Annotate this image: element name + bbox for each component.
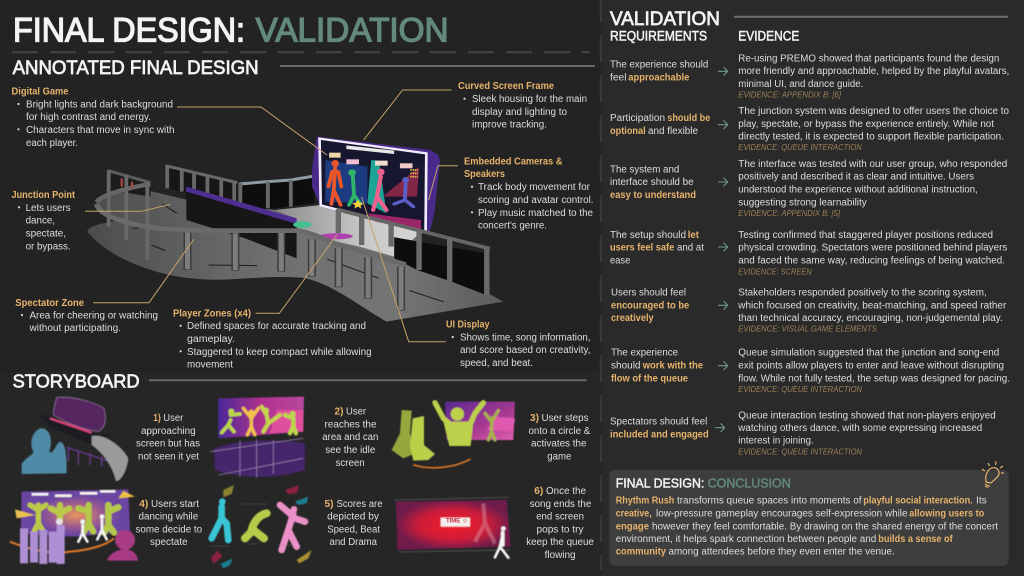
storyboard illustrations, first columns xyxy=(10,397,312,568)
story caption 4: 4) xyxy=(139,499,148,510)
row 4: feel safe: users feel safe xyxy=(610,243,675,254)
callout: player zones: Player Zones (x4) xyxy=(173,308,251,320)
row 7: included and engaged: Spectators should feel xyxy=(610,417,707,428)
conclusion heading: FINAL DESIGN: xyxy=(616,476,704,490)
story caption 5: depicted by xyxy=(327,512,379,522)
callout: embedded cameras and speakers: concert's genre. xyxy=(478,220,547,232)
callout: UI display: Shows time, song information, xyxy=(460,332,590,344)
callout: digital game xyxy=(12,86,174,149)
story caption 6 xyxy=(526,486,594,561)
row 6: flow of the queue: flow of the queue xyxy=(611,373,688,384)
title: VALIDATION xyxy=(256,12,449,50)
row 4: feel safe xyxy=(610,230,1007,276)
sketch 1: user approaching xyxy=(22,397,128,481)
story caption 4: Users start xyxy=(151,499,199,510)
story caption 6: end screen xyxy=(536,512,584,522)
callout: junction point: dance, xyxy=(26,216,55,226)
conclusion heading: CONCLUSION xyxy=(708,476,791,490)
callout: player zones: Staggered to keep compact while allowing xyxy=(187,347,372,358)
row 1: approachable: The experience should xyxy=(610,60,708,71)
story caption 3: onto a circle & xyxy=(528,426,591,437)
callout: curved screen frame: display and lighting to xyxy=(472,107,567,118)
row 7: included and engaged: Queue interaction testing showed that non-players enjoyed xyxy=(738,410,996,421)
panel: conclusion xyxy=(609,462,1009,566)
story caption 3: game xyxy=(547,452,572,462)
conclusion text: low-pressure gameplay encourages self-expression while xyxy=(656,508,908,519)
row 2: optional xyxy=(610,106,1009,152)
conclusion text: Rhythm Rush xyxy=(616,496,674,507)
screen housing xyxy=(312,137,440,233)
callout: embedded cameras and speakers: Play music matched to the xyxy=(478,208,593,219)
row 4: feel safe: ease xyxy=(610,255,631,266)
callout: junction point: or bypass. xyxy=(26,242,71,252)
row 2: optional: optional xyxy=(610,126,646,137)
row 6: flow of the queue xyxy=(611,348,1010,394)
story caption 2: see the idle xyxy=(325,445,376,456)
story caption 6: pops to try xyxy=(536,524,584,536)
conclusion text: transforms queue spaces into moments of xyxy=(677,496,862,507)
row 4: feel safe: let xyxy=(688,230,700,241)
row 6: flow of the queue: exit points allow players to enter and leave without disrupting xyxy=(738,360,1004,371)
row 6: flow of the queue: should xyxy=(611,360,640,371)
heading: validation: VALIDATION xyxy=(610,8,720,30)
story caption 3: 3) xyxy=(530,413,539,424)
callout: digital game: Bright lights and dark background xyxy=(26,100,173,110)
row 1: approachable xyxy=(610,53,1009,100)
row 5: encouraged: Stakeholders responded positively to the scoring system, xyxy=(738,287,987,298)
conclusion text: community xyxy=(616,547,666,558)
row 2: optional: play, spectate, or bypass the experience entirely. While not xyxy=(738,119,994,130)
callout: spectator zone: without participating. xyxy=(28,323,121,334)
callout: embedded cameras and speakers: Track body movement for xyxy=(478,182,591,193)
row 7: included and engaged: included and engaged xyxy=(610,429,709,440)
conclusion text: environment, it helps spark connection between people and xyxy=(616,534,876,545)
row 1: approachable: more friendly and approachable, helped by the playful avatars, xyxy=(738,66,1009,77)
story caption 2: 2) xyxy=(334,406,344,418)
heading: annotated final design: ANNOTATED FINAL DESIGN xyxy=(13,57,259,79)
row 1: approachable: minimal UI, and dance guide. xyxy=(738,79,863,90)
callout: embedded cameras and speakers: scoring and avatar control. xyxy=(478,195,594,206)
row 3: easy to understand: understood the experience without additional instruction, xyxy=(738,185,978,196)
callout: player zones: gameplay. xyxy=(187,334,235,345)
row 4: feel safe: EVIDENCE: SCREEN xyxy=(738,267,812,276)
time label on end screen: TIME ☺ xyxy=(446,518,468,524)
row 4: feel safe: physical crowding. Spectators were positioned behind players xyxy=(738,243,1007,254)
row 4: feel safe: The setup should xyxy=(610,230,686,241)
callout: junction point: Junction Point xyxy=(12,190,76,201)
row 6: flow of the queue: work with the xyxy=(642,360,703,371)
sketch 5: scores xyxy=(210,485,312,568)
row 2: optional: directly tested, it is expected to support flexible participation. xyxy=(738,132,1004,143)
row 7: included and engaged: watching others dance, with some expressing increased xyxy=(737,423,982,434)
sketch 2: idle screen xyxy=(210,397,305,477)
story caption 3: activates the xyxy=(531,439,587,450)
storyboard illustrations, last columns xyxy=(392,402,515,558)
row 6: flow of the queue: EVIDENCE: QUEUE INTERACTION xyxy=(738,385,862,394)
row 4: feel safe: and faced the same way, reducing feelings of being watched. xyxy=(738,255,1005,266)
purple-topped wall xyxy=(186,187,312,258)
row 4: feel safe: and at xyxy=(677,243,704,254)
row 5: encouraged: than technical accuracy, encouraging, non-judgemental play. xyxy=(738,313,1003,324)
row 3: easy to understand: The system and xyxy=(610,164,679,175)
row 7: included and engaged: EVIDENCE: QUEUE INTERACTION xyxy=(738,447,862,456)
story caption 1: not seen it yet xyxy=(138,452,199,462)
callout: junction point: Lets users xyxy=(26,203,71,214)
story caption 1: screen but has xyxy=(136,439,200,450)
row 3: easy to understand: interface should be xyxy=(610,177,694,188)
floor xyxy=(87,191,503,322)
story caption 4 xyxy=(136,499,203,548)
row 1: approachable: Re-using PREMO showed that participants found the design xyxy=(738,53,999,64)
sketch 4: users dancing xyxy=(10,489,138,564)
story caption 3 xyxy=(528,413,591,462)
row 4: feel safe: Testing confirmed that staggered player positions reduced xyxy=(738,230,993,241)
story caption 3: User steps xyxy=(542,413,588,424)
callout: UI display: UI Display xyxy=(446,320,490,330)
row 5: encouraged: creatively xyxy=(611,313,654,324)
back fences xyxy=(96,165,315,260)
callout: player zones xyxy=(173,308,372,370)
callout: player zones: Defined spaces for accurate tracking and xyxy=(187,321,366,332)
callout: digital game: Digital Game xyxy=(12,86,69,98)
callout: embedded cameras and speakers: Embedded Cameras & xyxy=(464,156,562,168)
conclusion text: however they feel comfortable. By drawing on the shared energy of the concert xyxy=(652,521,998,532)
row 2: optional: and flexible xyxy=(648,126,698,137)
callout: junction point xyxy=(12,190,76,252)
right fence xyxy=(337,209,490,295)
callout: embedded cameras and speakers: Speakers xyxy=(464,169,505,180)
story caption 5: 5) xyxy=(324,499,334,510)
row 6: flow of the queue: The experience xyxy=(611,348,678,359)
story caption 5 xyxy=(324,499,383,548)
callout: junction point: spectate, xyxy=(26,228,66,240)
floor circle xyxy=(319,233,353,239)
sketch 6: end screen xyxy=(394,497,511,558)
story caption 2: User xyxy=(346,406,367,418)
conclusion text: Its xyxy=(976,496,987,507)
story caption 5: Speed, Beat xyxy=(327,524,380,536)
conclusion text: builds a sense of xyxy=(878,534,953,545)
story caption 6: flowing xyxy=(545,550,576,561)
conclusion text: creative, xyxy=(616,508,652,519)
row 3: easy to understand xyxy=(610,159,1007,218)
floor arrows xyxy=(132,204,444,302)
story caption 2: screen xyxy=(336,458,365,469)
column heading: evidence: EVIDENCE xyxy=(738,28,799,44)
sketch 3: stepping on circle xyxy=(392,402,515,468)
callout: curved screen frame: Sleek housing for the main xyxy=(472,94,587,105)
callout: player zones: movement xyxy=(187,360,233,370)
conclusion heading xyxy=(616,476,791,490)
row 5: encouraged: EVIDENCE: VISUAL GAME ELEMENTS xyxy=(738,325,877,334)
icon: light bulb xyxy=(982,462,1004,488)
story caption 5: Scores are xyxy=(336,499,383,510)
callout: digital game: each player. xyxy=(26,138,78,149)
story caption 6: 6) xyxy=(534,486,543,497)
row 2: optional: should be xyxy=(667,113,711,124)
conclusion text: engage xyxy=(616,521,649,532)
story caption 4: dancing while xyxy=(138,512,199,522)
story caption 2: area and can xyxy=(322,432,378,443)
row 1: approachable: feel xyxy=(610,73,626,84)
callout: UI display: and score based on creativity, xyxy=(460,345,590,356)
row 5: encouraged: which focused on creativity, beat-matching, and speed rather xyxy=(737,300,1007,311)
callout: digital game: for high contrast and energy. xyxy=(26,112,151,123)
callout: embedded cameras and speakers xyxy=(464,156,594,232)
story caption 1: approaching xyxy=(141,426,196,437)
front rail xyxy=(96,204,406,311)
story caption 4: some decide to xyxy=(136,524,203,536)
callout: digital game: Characters that move in sync with xyxy=(26,125,174,136)
story caption 1 xyxy=(136,413,200,462)
row 5: encouraged: Users should feel xyxy=(611,287,686,298)
row 2: optional: Participation xyxy=(610,113,665,124)
conclusion text: allowing users to xyxy=(909,508,984,519)
callout: curved screen frame: Curved Screen Frame xyxy=(458,81,554,92)
row 3: easy to understand: The interface was tested with our user group, who responded xyxy=(738,159,1007,170)
row 5: encouraged xyxy=(611,287,1007,334)
story caption 2 xyxy=(322,406,378,469)
3D render of the final design xyxy=(87,137,503,322)
row 7: included and engaged: interest in joining. xyxy=(738,436,814,447)
row 5: encouraged: encouraged to be xyxy=(611,300,690,311)
row 2: optional: The junction system was designed to offer users the choice to xyxy=(738,106,1009,117)
title: FINAL DESIGN: xyxy=(13,12,245,50)
row 3: easy to understand: easy to understand xyxy=(610,190,696,201)
story caption 2: reaches the xyxy=(324,420,377,430)
callout: spectator zone: Area for cheering or watching xyxy=(30,310,158,322)
callout: spectator zone: Spectator Zone xyxy=(15,298,84,309)
story caption 5: and Drama xyxy=(330,537,377,548)
callout: UI display xyxy=(446,320,590,369)
row 7: included and engaged xyxy=(610,410,996,456)
story caption 6: keep the queue xyxy=(526,537,594,548)
row 3: easy to understand: suggesting strong learnability xyxy=(738,197,867,208)
row 2: optional: EVIDENCE: QUEUE INTERACTION xyxy=(738,143,862,152)
callout: curved screen frame: improve tracking. xyxy=(472,120,547,130)
callout: spectator zone xyxy=(15,298,158,334)
story caption 1: 1) xyxy=(153,413,161,424)
row 3: easy to understand: EVIDENCE: APPENDIX B: [5] xyxy=(738,209,841,218)
conclusion text xyxy=(616,496,998,558)
callout: curved screen frame xyxy=(458,81,587,130)
story caption 4: spectate xyxy=(150,537,188,548)
row 6: flow of the queue: Queue simulation suggested that the junction and song-end xyxy=(738,348,999,359)
title xyxy=(13,12,449,50)
column heading: requirements: REQUIREMENTS xyxy=(610,28,707,44)
story caption 6: Once the xyxy=(546,486,586,497)
row 1: approachable: approachable xyxy=(628,73,690,84)
story caption 6: song ends the xyxy=(530,499,592,510)
leader lines xyxy=(85,90,458,342)
callout: UI display: speed, and beat. xyxy=(460,358,533,369)
story caption 1: User xyxy=(163,413,184,424)
row 3: easy to understand: positively and described it as clear and intuitive. Users xyxy=(738,172,974,183)
conclusion text: playful social interaction. xyxy=(863,496,973,507)
conclusion text: among attendees before they even enter the venue. xyxy=(668,547,895,558)
row 1: approachable: EVIDENCE: APPENDIX B: [6] xyxy=(738,91,842,100)
heading: storyboard: STORYBOARD xyxy=(13,372,140,392)
row 6: flow of the queue: flow. While not fully tested, the setup was designed for pacing. xyxy=(738,373,1010,384)
